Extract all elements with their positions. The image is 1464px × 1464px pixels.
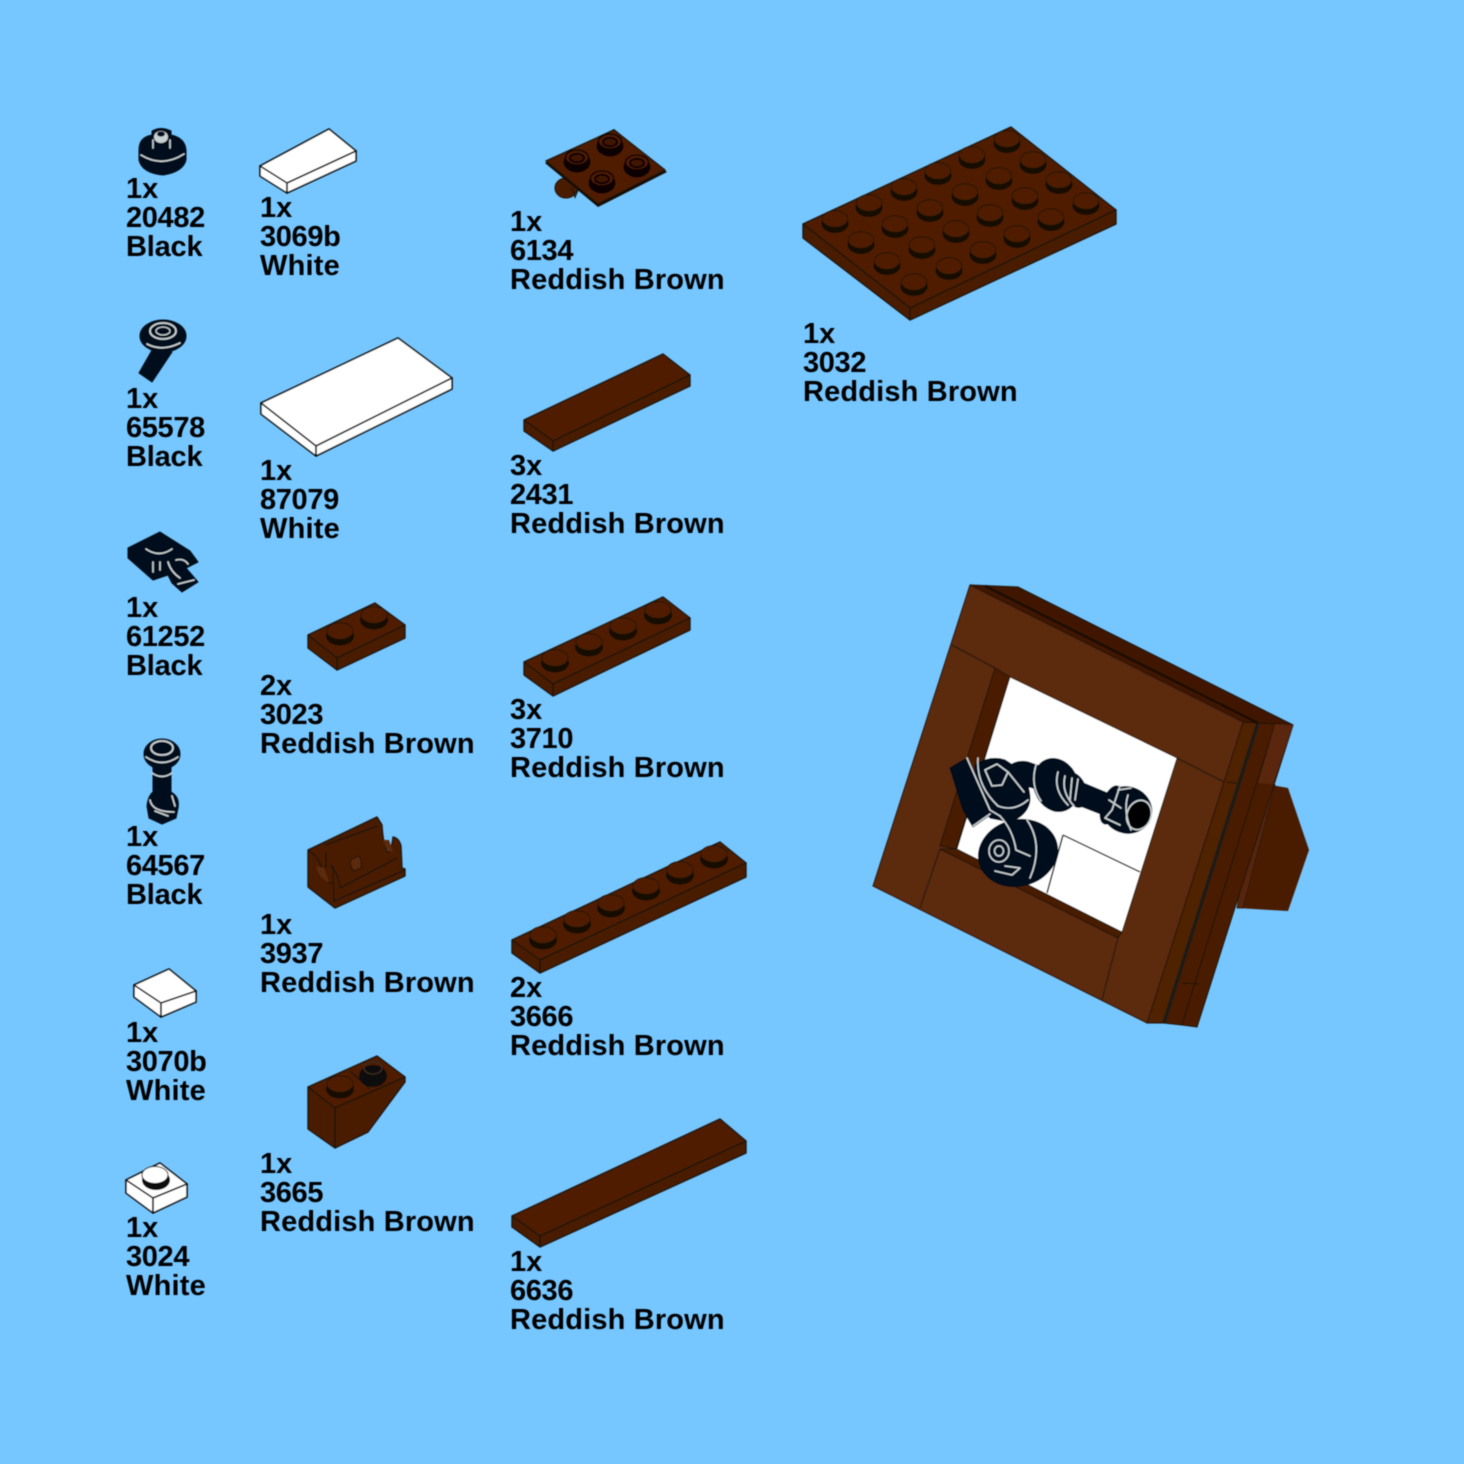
icon: white 1x2 tile [260,129,356,193]
icon: white 1x1 plate [126,1163,187,1213]
label: Reddish Brown [260,728,475,760]
part: 3937 Reddish Brown [260,817,475,999]
white window [957,677,1177,932]
part: 3069b White [260,129,356,282]
label: 2x [510,972,542,1004]
part: 3666 Reddish Brown [510,842,746,1062]
part: 3710 Reddish Brown [510,597,725,784]
icon: brown 1x4 tile [524,354,690,451]
part: 20482 Black [126,128,205,263]
back stand [1237,782,1309,911]
icon: brown 1x6 plate [512,842,746,973]
label: 3665 [260,1177,323,1209]
label: Reddish Brown [260,1206,475,1238]
icon: brown 2x2 hinge plate [545,129,667,207]
part: 6636 Reddish Brown [510,1119,746,1336]
label: 1x [126,821,158,853]
label: 20482 [126,202,205,234]
label: 1x [260,909,292,941]
icon: brown 4x6 plate [803,127,1116,320]
label: 1x [260,192,292,224]
part: 3032 Reddish Brown [803,127,1116,408]
icon: round black plate with bar [139,128,186,175]
label: 6134 [510,235,573,267]
part: 3070b White [126,969,206,1107]
label: 87079 [260,484,339,516]
minifig part: robot arm and wheel [950,752,1158,895]
top edge strip [970,585,1293,725]
label: Reddish Brown [803,376,1018,408]
icon: white 1x1 tile [134,969,196,1017]
part: 61252 Black [126,532,205,682]
part: 87079 White [260,338,452,545]
part: 3023 Reddish Brown [260,603,475,760]
inner shadow strips [940,668,1122,938]
label: 1x [126,173,158,205]
icon: black ball socket with arm [139,320,186,382]
label: White [260,250,340,282]
icon: brown 1x4 plate [524,597,690,696]
label: Black [126,650,203,682]
label: 2431 [510,479,573,511]
label: 1x [260,455,292,487]
part: 65578 Black [126,320,205,473]
icon: white 2x4 tile [261,338,452,456]
label: Reddish Brown [510,752,725,784]
part: 64567 Black [126,739,205,911]
label: 3666 [510,1001,573,1033]
icon: brown 1x2 plate [308,603,405,670]
label: 1x [126,1017,158,1049]
icon: black plate with clip [128,532,198,592]
label: 3032 [803,347,866,379]
part: 6134 Reddish Brown [510,129,725,296]
part: 2431 Reddish Brown [510,354,725,540]
label: 64567 [126,850,205,882]
label: 1x [510,1246,542,1278]
label: Black [126,879,203,911]
label: White [260,513,340,545]
label: 3x [510,694,542,726]
label: White [126,1270,206,1302]
label: 6636 [510,1275,573,1307]
label: 2x [260,670,292,702]
label: 1x [126,592,158,624]
label: Reddish Brown [510,1030,725,1062]
label: 1x [126,383,158,415]
part: 3665 Reddish Brown [260,1056,475,1238]
label: 1x [260,1148,292,1180]
label: 61252 [126,621,205,653]
label: 3710 [510,723,573,755]
label: Black [126,441,203,473]
label: Black [126,231,203,263]
label: 65578 [126,412,205,444]
icon: brown hinge brick [308,817,405,908]
label: Reddish Brown [260,967,475,999]
parts and assembled model [126,127,1309,1336]
icon: brown inverted slope brick [308,1056,405,1148]
label: White [126,1075,206,1107]
label: 3937 [260,938,323,970]
label: Reddish Brown [510,264,725,296]
frame joint lines [920,645,1224,1000]
label: Reddish Brown [510,508,725,540]
part: 3024 White [126,1163,206,1302]
icon: black bar with connector [144,739,180,824]
label: 1x [803,318,835,350]
label: Reddish Brown [510,1304,725,1336]
assembled model: picture frame [873,585,1309,1027]
label: 3x [510,450,542,482]
frame front face [873,585,1243,1023]
label: 1x [126,1212,158,1244]
label: 1x [510,206,542,238]
label: 3069b [260,221,340,253]
label: 3024 [126,1241,189,1273]
icon: brown 1x6 tile [512,1119,746,1247]
side edge layers [985,586,1293,1027]
label: 3070b [126,1046,206,1078]
label: 3023 [260,699,323,731]
